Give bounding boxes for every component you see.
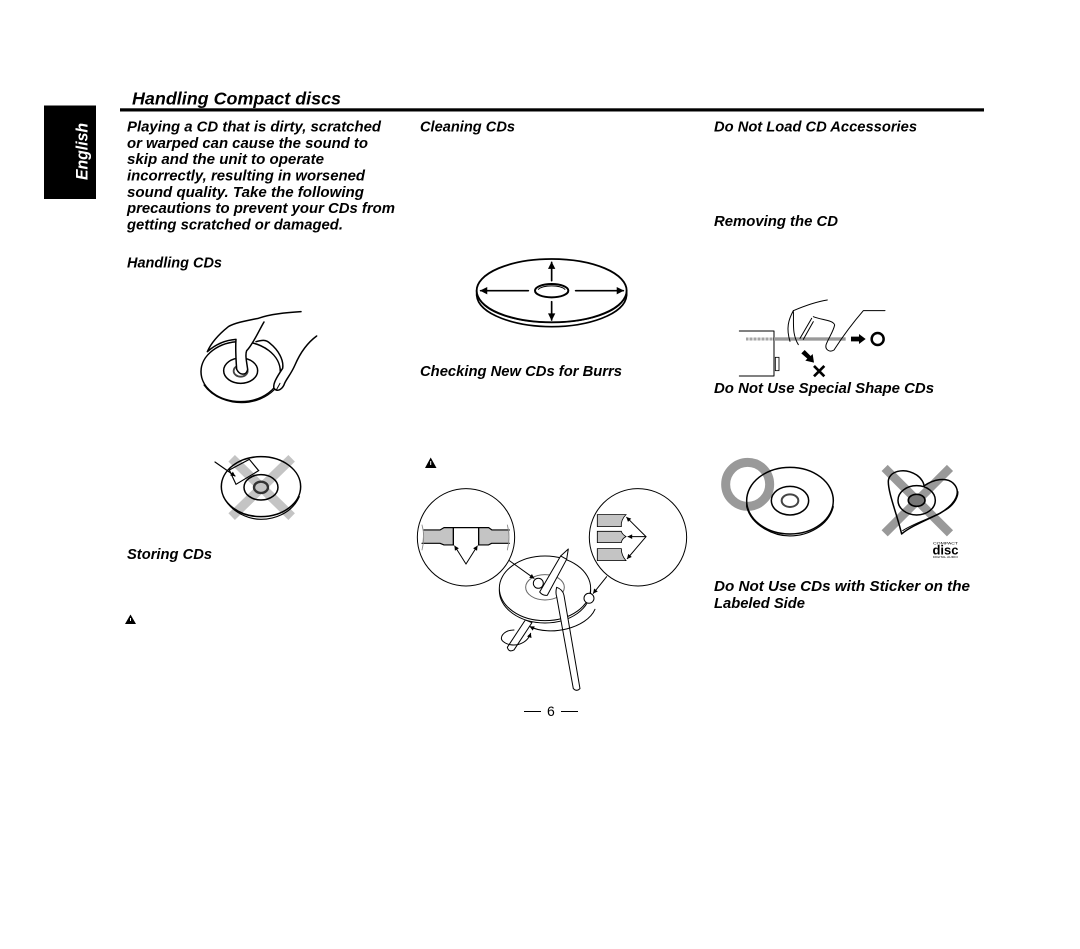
disc [499, 558, 591, 623]
intro text block: getting scratched or damaged. [126, 218, 343, 234]
intro text block [126, 120, 395, 234]
illustration: CD with sticker crossed out [215, 457, 301, 519]
heading: Storing CDs: Storing CDs [127, 547, 212, 563]
intro text block: or warped can cause the sound to [127, 136, 368, 152]
detail circle: centre hole burrs [417, 489, 515, 586]
detail circle: outer edge burrs [589, 489, 687, 586]
intro text block: precautions to prevent your CDs from [126, 201, 395, 217]
intro text block: Playing a CD that is dirty, scratched [127, 120, 382, 136]
icon: compact disc logo: DIGITAL AUDIO [933, 555, 959, 559]
rotation arrows [530, 609, 595, 631]
heading: Do Not Use CDs with Sticker on the Labeled Side [714, 579, 970, 612]
title: Handling Compact discs [132, 88, 341, 108]
upper pencil [540, 549, 568, 595]
arrow diagonal [801, 350, 814, 363]
page number [524, 703, 578, 719]
illustration: cleaning CD with radial arrows [477, 259, 627, 327]
heading: Checking New CDs for Burrs: Checking New CDs for Burrs [420, 364, 622, 380]
intro text block: skip and the unit to operate [127, 152, 324, 168]
intro text block: sound quality. Take the following [127, 185, 364, 201]
language tab: English: English [74, 123, 92, 180]
unit slot [739, 331, 774, 376]
illustration: removing the CD from the unit [739, 300, 885, 376]
heading: Cleaning CDs: Cleaning CDs [420, 120, 515, 136]
illustration: checking burrs with pencils [417, 489, 687, 690]
OK ring [872, 333, 884, 345]
icon: compact disc logo: disc [932, 544, 959, 558]
illustration: hand holding CD [201, 312, 317, 403]
illustration: round CD with OK ring [726, 462, 833, 536]
icon: warning triangle, checking [425, 458, 436, 468]
intro text block: incorrectly, resulting in worsened [127, 168, 366, 184]
heading: Removing the CD: Removing the CD [714, 214, 839, 230]
language tab: English [44, 106, 96, 199]
icon: warning triangle, storing [125, 614, 136, 624]
heading: Do Not Use CDs with Sticker on the Labeled Side: Labeled Side [714, 596, 805, 612]
CD edge [774, 337, 846, 341]
lower pencil under disc [507, 620, 532, 651]
leader lines [509, 561, 534, 578]
title [120, 88, 984, 112]
page number: 6 [547, 703, 555, 719]
heading: Do Not Use CDs with Sticker on the Labeled Side: Do Not Use CDs with Sticker on the [714, 579, 970, 595]
small circles on disc [533, 578, 543, 588]
heading: Do Not Load CD Accessories: Do Not Load CD Accessories [714, 120, 917, 136]
heading: Do Not Use Special Shape CDs: Do Not Use Special Shape CDs [714, 381, 934, 397]
NG cross [814, 366, 824, 376]
icon: compact disc logo: COMPACT [933, 542, 959, 546]
heading: Handling CDs: Handling CDs [127, 256, 222, 272]
long pencil [556, 587, 580, 690]
hand [788, 300, 885, 351]
arrow right [851, 334, 866, 344]
illustration: heart-shaped CD crossed out [885, 468, 958, 534]
